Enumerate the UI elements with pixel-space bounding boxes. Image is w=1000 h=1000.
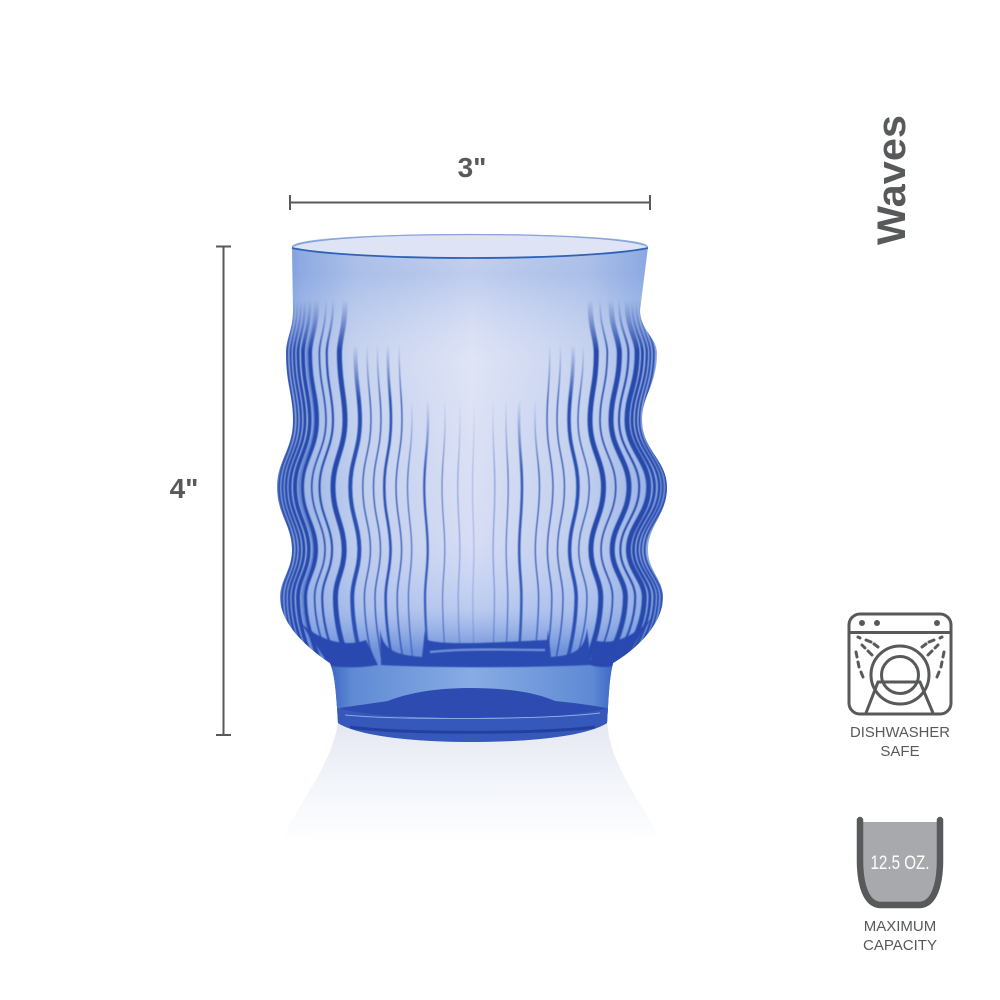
icon: dishwasher [849, 614, 951, 714]
capacity value: 12.5 OZ. [870, 853, 930, 874]
glass reflection [283, 722, 660, 844]
right outer ripples [585, 300, 666, 668]
base of glass [322, 658, 622, 730]
left outer ripples [279, 300, 350, 668]
capacity label: CAPACITY [863, 937, 937, 954]
height label: 4" [170, 473, 198, 504]
product name: Waves [870, 115, 914, 245]
dishwasher safe badge [849, 614, 951, 760]
dark dome in base [340, 688, 606, 718]
width line [290, 195, 650, 210]
icon: cup [860, 822, 940, 905]
dishwasher label: DISHWASHER [850, 724, 950, 741]
middle ripples [348, 348, 591, 658]
glass rim line [292, 248, 648, 258]
rim of base [337, 708, 608, 742]
height line [216, 246, 231, 735]
dimension: width 3 inches [290, 152, 650, 210]
center ripples [406, 404, 541, 656]
maximum capacity badge [860, 820, 940, 954]
dimension: height 4 inches [170, 246, 231, 735]
blue wavy glass [270, 230, 670, 745]
glass opening [292, 235, 648, 258]
dishwasher label: SAFE [880, 743, 920, 760]
capacity label: MAXIMUM [864, 918, 936, 935]
glass body [277, 234, 667, 742]
width label: 3" [458, 152, 486, 183]
dark scalloped band [300, 618, 652, 667]
